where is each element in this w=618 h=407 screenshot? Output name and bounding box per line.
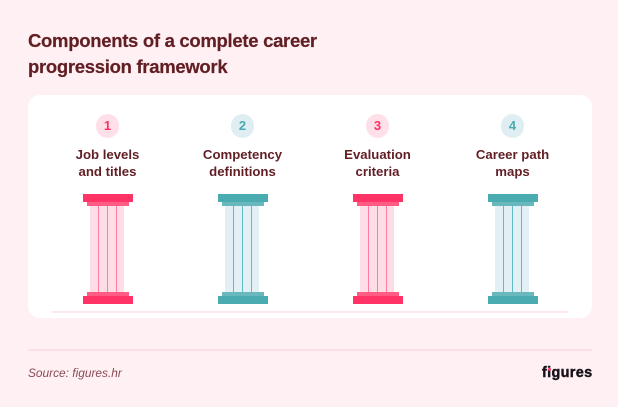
icon: teal pillar 2: [218, 194, 268, 304]
logo: figures: figures: [542, 365, 592, 381]
number badge 3: 3: [374, 118, 381, 133]
column 1: job levels and titles: [76, 114, 139, 304]
number badge 3: [366, 114, 389, 138]
label: evaluation criteria: Evaluation: [344, 147, 411, 162]
number badge 4: 4: [509, 118, 516, 133]
label: career path maps: Career path: [476, 147, 549, 162]
label: career path maps: [476, 147, 549, 179]
source note: Source: figures.hr: [28, 366, 122, 380]
title: Components of a complete career: [28, 30, 317, 51]
icon: pink pillar 1: [83, 194, 133, 304]
column 4: career path maps: [476, 114, 549, 304]
column 2: competency definitions: [203, 114, 282, 304]
label: job levels and titles: and titles: [79, 164, 136, 179]
number badge 2: 2: [239, 118, 246, 133]
label: job levels and titles: [76, 147, 139, 179]
label: competency definitions: [203, 147, 282, 179]
label: career path maps: maps: [495, 164, 530, 179]
number badge 1: [96, 114, 119, 138]
number badge 1: 1: [104, 118, 111, 133]
title: [28, 30, 317, 78]
label: evaluation criteria: [344, 147, 411, 179]
icon: teal pillar 4: [488, 194, 538, 304]
panel: framework pillars: [28, 95, 592, 318]
number badge 4: [501, 114, 524, 138]
column 3: evaluation criteria: [344, 114, 411, 304]
label: job levels and titles: Job levels: [76, 147, 139, 162]
label: competency definitions: definitions: [209, 164, 276, 179]
number badge 2: [231, 114, 254, 138]
title: progression framework: [28, 56, 227, 77]
label: competency definitions: Competency: [203, 147, 282, 162]
icon: pink pillar 3: [353, 194, 403, 304]
label: evaluation criteria: criteria: [356, 164, 400, 179]
